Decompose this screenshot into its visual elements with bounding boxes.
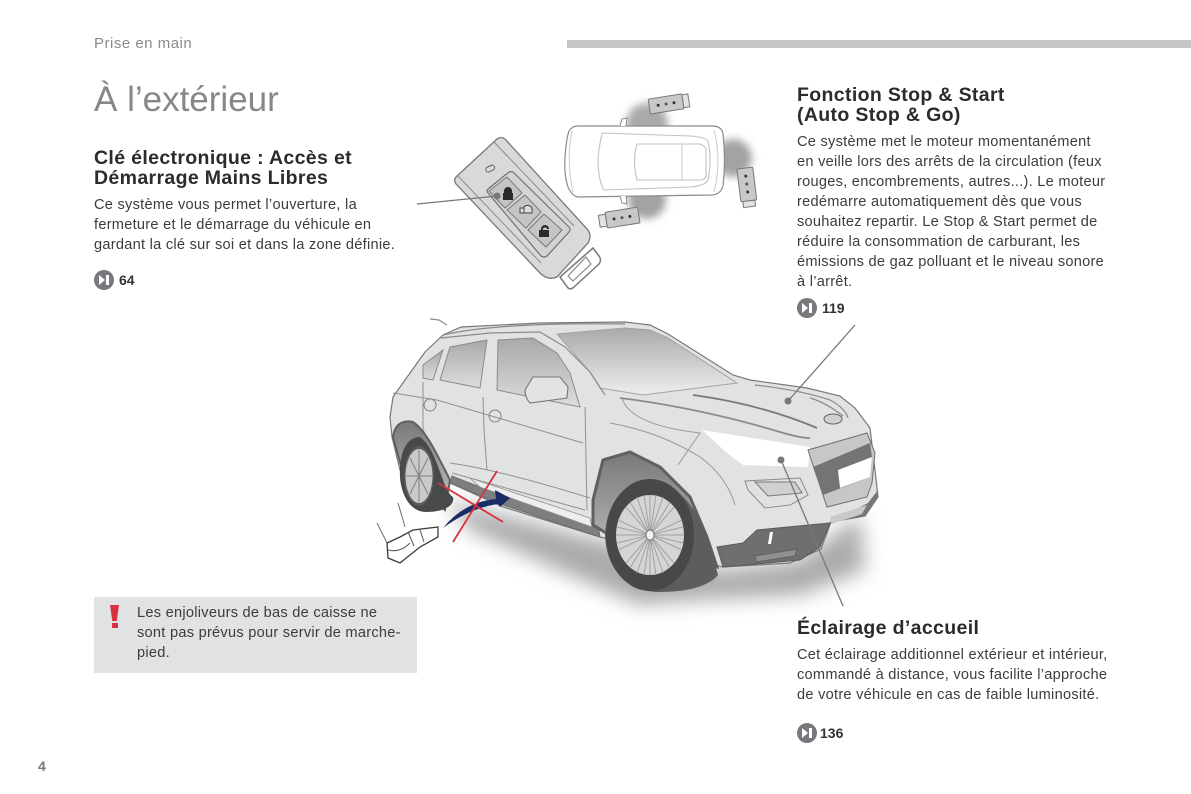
body character lines [393, 382, 590, 510]
arrow: foot gesture [443, 490, 510, 528]
warning text: sont pas prévus pour servir de marche- [137, 625, 401, 641]
heading: electronic key: Démarrage Mains Libres [94, 167, 328, 189]
left section: electronic key [94, 147, 395, 290]
body text: stop and start: en veille lors des arrêts de la circulation (feux [797, 154, 1102, 170]
foot [377, 503, 438, 563]
headlamp cluster [745, 478, 808, 508]
page number: 4 [38, 758, 46, 774]
body text: electronic key [94, 197, 395, 253]
body text: stop and start: rouges, encombrements, autres...). Le moteur [797, 174, 1105, 190]
car shadow [445, 500, 865, 605]
heading: stop and start [797, 84, 1005, 126]
body text: welcome lighting: Cet éclairage additionnel extérieur et intérieur, [797, 647, 1107, 663]
heading: stop and start: Fonction Stop & Start [797, 84, 1005, 106]
section label: Prise en main [94, 35, 192, 52]
prohibition cross [438, 471, 503, 542]
front wheel arch [593, 452, 717, 567]
licence plate [838, 457, 872, 488]
warning text [137, 605, 401, 661]
body text: electronic key: gardant la clé sur soi et dans la zone définie. [94, 237, 395, 253]
hood lines [620, 398, 810, 438]
body text: stop and start [797, 134, 1105, 290]
rear wheel [400, 437, 453, 512]
car illustration [377, 319, 878, 605]
quarter window [423, 350, 443, 380]
door handles [424, 399, 501, 422]
page reference 64: 64 [119, 272, 135, 288]
leader line: headlight [778, 456, 843, 606]
page reference 64 [94, 270, 135, 290]
heading: electronic key: Clé électronique : Accès et [94, 147, 352, 169]
front bumper [717, 523, 830, 567]
rear wheel arch [393, 421, 450, 510]
front door window [497, 338, 580, 407]
car body [390, 322, 878, 567]
sill [450, 476, 600, 537]
body text: stop and start: réduire la consommation de carburant, les [797, 234, 1080, 250]
grille [808, 433, 875, 507]
logo [824, 414, 842, 424]
body text: welcome lighting [797, 647, 1107, 703]
body text: stop and start: souhaitez repartir. Le Stop & Start permet de [797, 214, 1098, 230]
icon: key fob right [737, 167, 757, 208]
body text: stop and start: à l’arrêt. [797, 274, 852, 290]
heading: electronic key [94, 147, 352, 189]
page reference 136 [797, 723, 843, 743]
warning box [94, 597, 417, 673]
page reference 119 [797, 298, 845, 318]
body text: electronic key: fermeture et le démarrage du véhicule en [94, 217, 371, 233]
right section: stop and start [797, 84, 1105, 318]
title: À l’extérieur [94, 80, 279, 119]
icon: detection zones around car [626, 103, 752, 219]
page reference 136: 136 [820, 725, 843, 741]
leader line: key [417, 192, 500, 204]
leader line: hood [784, 325, 855, 404]
icon: electronic key [455, 138, 600, 289]
header bar [567, 40, 1191, 48]
body text: electronic key: Ce système vous permet l’ouverture, la [94, 197, 357, 213]
icon: car top view [565, 118, 724, 204]
rear door window [440, 340, 487, 388]
warning text: Les enjoliveurs de bas de caisse ne [137, 605, 377, 621]
icon: key fob top [648, 93, 690, 114]
body text: welcome lighting: de votre véhicule en cas de faible luminosité. [797, 687, 1099, 703]
body text: stop and start: redémarre automatiquement dès que vous [797, 194, 1082, 210]
heading: stop and start: (Auto Stop & Go) [797, 104, 961, 126]
heading: welcome lighting: Éclairage d’accueil [797, 617, 979, 639]
warning text: pied. [137, 645, 170, 661]
body text: welcome lighting: commandé à distance, vous facilite l’approche [797, 667, 1107, 683]
windshield [557, 328, 737, 395]
right section: welcome lighting [797, 616, 1107, 743]
page reference 119: 119 [822, 300, 845, 316]
icon: key fob bottom [598, 207, 640, 229]
mirror [525, 377, 568, 403]
body text: stop and start: Ce système met le moteur momentanément [797, 134, 1091, 150]
roof rail [430, 319, 625, 395]
fender lines [610, 398, 735, 505]
headlight [702, 430, 810, 467]
body text: stop and start: émissions de gaz polluant et le niveau sonore [797, 254, 1104, 270]
warning icon [110, 605, 119, 628]
front wheel [605, 479, 718, 592]
